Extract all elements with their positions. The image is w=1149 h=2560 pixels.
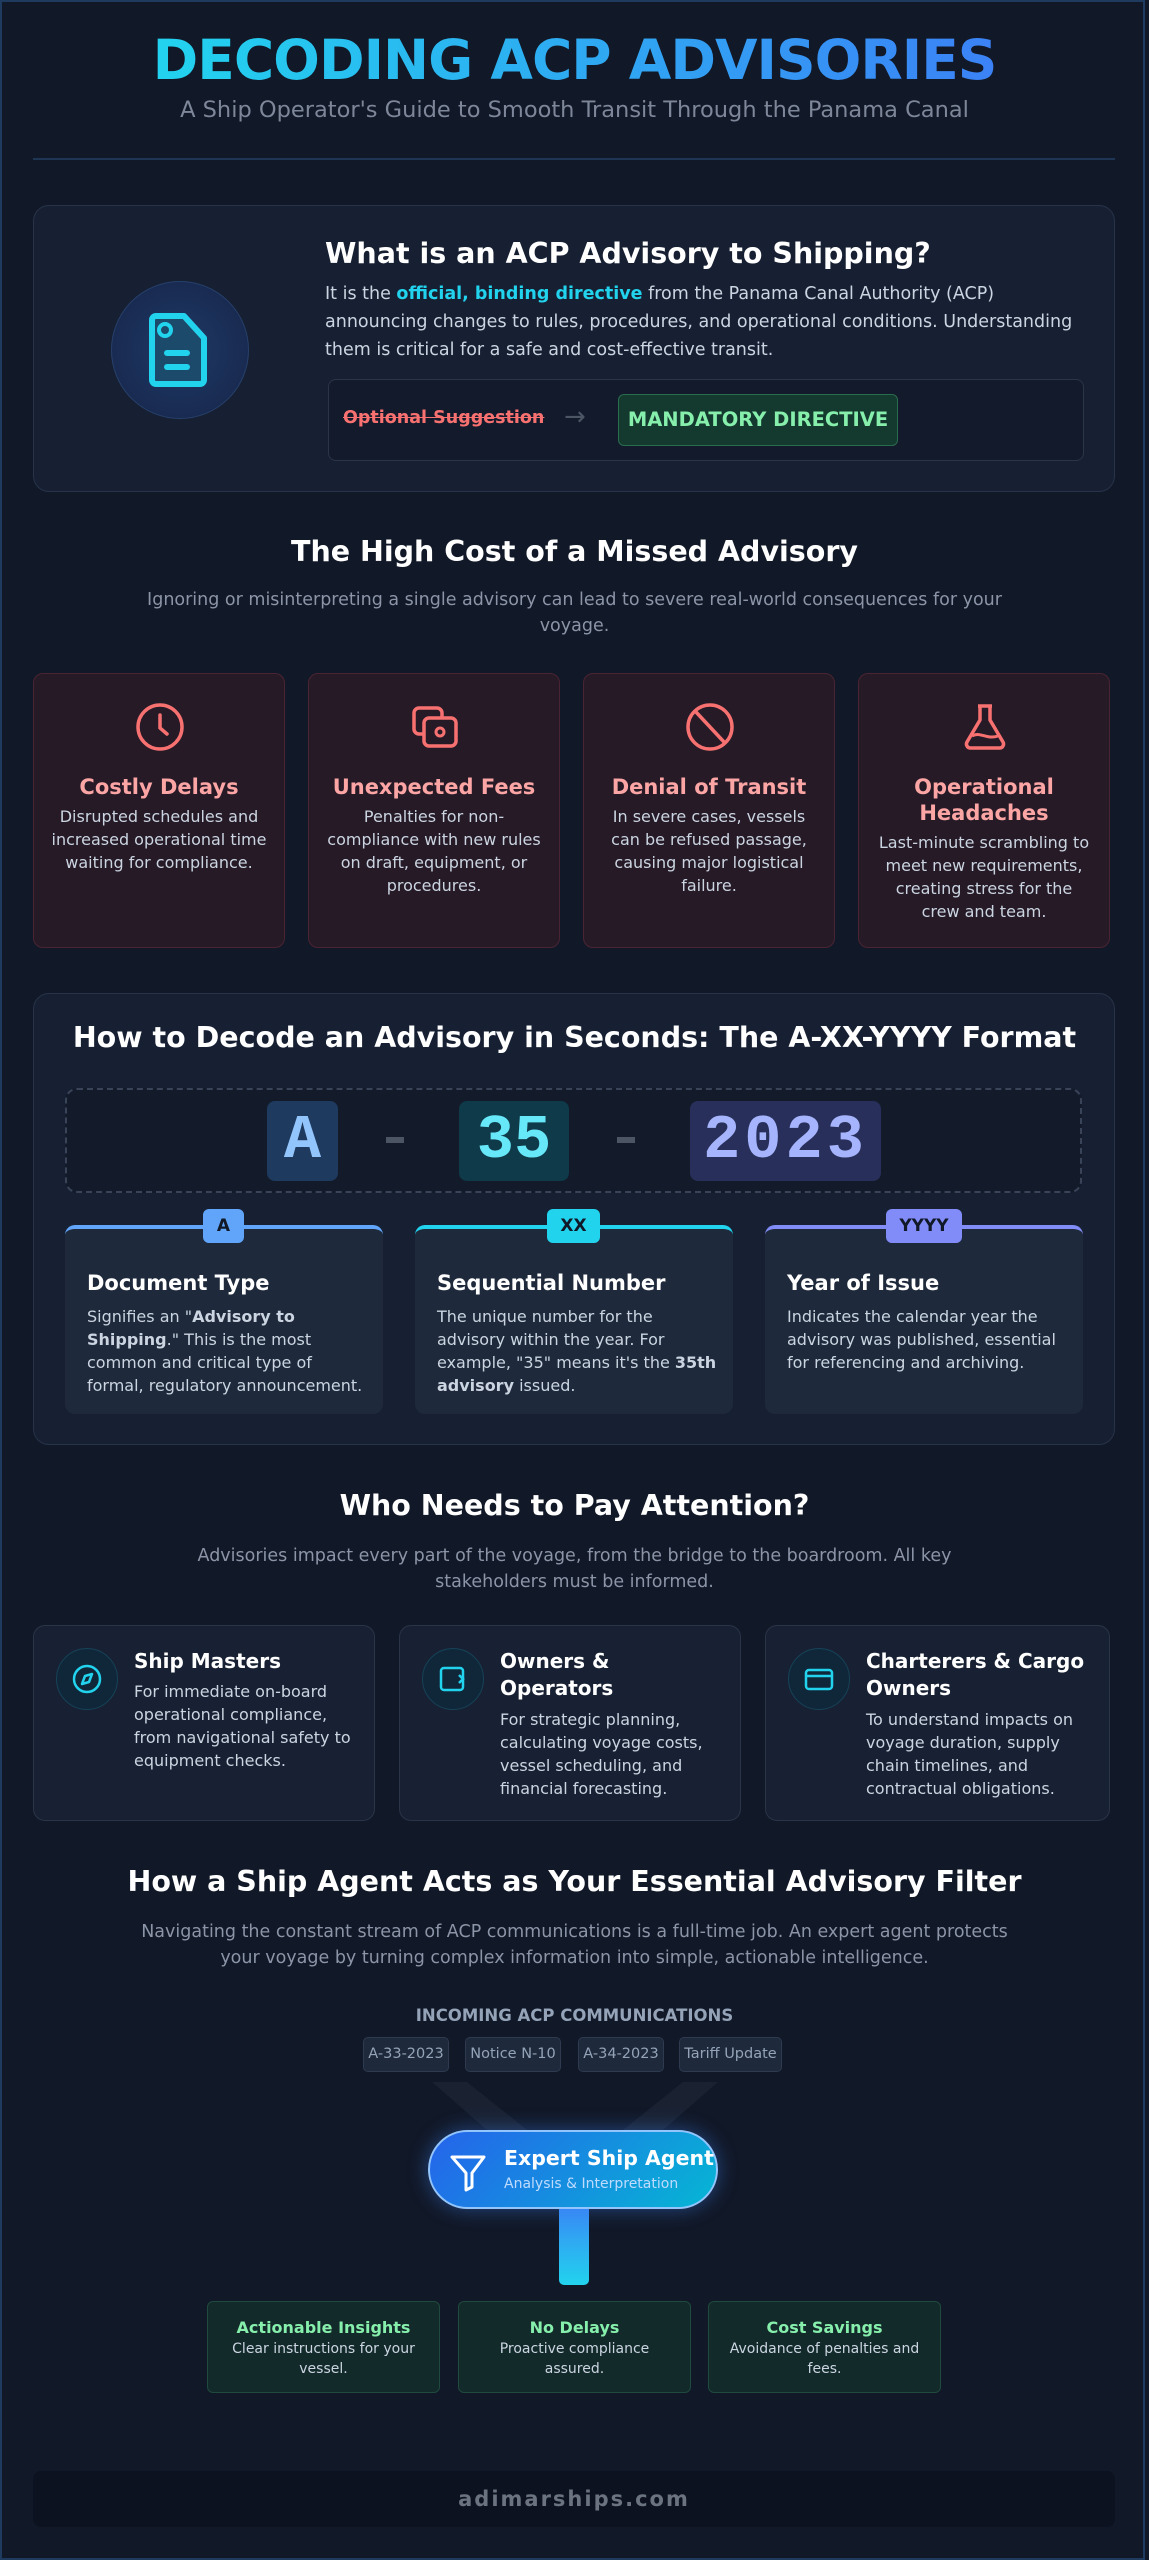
icon: card [788,1648,850,1710]
result: no delays: assured. [545,2361,604,2377]
panel: decode format [33,993,1115,1445]
icon: clock [136,703,184,751]
card: ship masters: For immediate on-board operational compliance, from navigational safety to equipment checks. [134,1682,351,1770]
result: no delays: No Delays [530,2318,619,2337]
stem [559,2200,589,2285]
subtitle: ship agent: Navigating the constant stream of ACP communications is a full-time job. An expert agent protects your voyage by turning complex information into simple, actionable intelligence. [141,1922,1008,1968]
panel: operational headaches: Operational [914,775,1054,799]
result: actionable insights: Actionable Insights [237,2318,410,2337]
comparison box: Optional Suggestion [343,408,544,428]
panel: costly delays: Disrupted schedules and increased operational time waiting for compliance. [52,807,266,872]
card: charterers: Owners [866,1676,951,1700]
result: cost savings: fees. [808,2361,841,2377]
card: document type [65,1225,383,1414]
tile: A: A [284,1105,321,1176]
result: no delays [458,2301,691,2393]
card: owners & operators [399,1625,741,1821]
badge: YYYY [886,1209,962,1243]
panel: denial of transit [583,673,835,948]
icon: ban [686,703,734,751]
result: cost savings [708,2301,941,2393]
expert ship agent pill [428,2130,718,2209]
result: actionable insights: vessel. [299,2361,348,2377]
mandatory badge: MANDATORY DIRECTIVE [628,408,888,431]
card: charterers [765,1625,1110,1821]
card: owners & operators: Operators [500,1676,613,1700]
result: actionable insights: Clear instructions for your [232,2341,415,2357]
format display [65,1088,1082,1193]
result: actionable insights [207,2301,440,2393]
card: year of issue [765,1225,1083,1414]
panel: unexpected fees: Unexpected Fees [333,775,535,799]
heading: who: Who Needs to Pay Attention? [340,1489,809,1522]
panel: what is an advisory [33,205,1115,492]
footer: adimarships.com [458,2487,690,2511]
badge: XX [547,1209,600,1243]
card: owners & operators: For strategic planning, calculating voyage costs, vessel scheduling, and financial forecasting. [500,1710,703,1798]
result: no delays: Proactive compliance [500,2341,649,2357]
badge: A [203,1209,244,1243]
tile: A [267,1101,338,1181]
panel: unexpected fees [308,673,560,948]
mandatory badge [618,394,898,446]
title: DECODING ACP ADVISORIES [153,28,996,92]
icon: filter [450,2156,486,2192]
chips: A-34-2023 [583,2046,659,2062]
card: year of issue: Indicates the calendar year the advisory was published, essential for referencing and archiving. [787,1307,1056,1372]
panel: costly delays [33,673,285,948]
card: sequential number [415,1225,733,1414]
result: cost savings: Cost Savings [766,2318,883,2337]
icon: document [111,281,249,419]
card: charterers: To understand impacts on voyage duration, supply chain timelines, and contractual obligations. [866,1710,1073,1798]
result: cost savings: Avoidance of penalties and [730,2341,919,2357]
heading: ship agent: How a Ship Agent Acts as Your Essential Advisory Filter [127,1865,1022,1898]
card: document type: Document Type [87,1271,269,1295]
card: ship masters: Ship Masters [134,1649,281,1673]
comparison box: → [564,402,586,432]
icon: wallet [422,1648,484,1710]
tile: 35 [459,1101,569,1181]
body text: It is the official, binding directive from the Panama Canal Authority (ACP) announcing changes to rules, procedures, and operational conditions. Understanding them is critical for a safe and cost-effective transit. [325,284,1072,360]
tile: 2023: 2023 [703,1105,868,1176]
badge: A: A [217,1216,230,1236]
card: ship masters [33,1625,375,1821]
card: year of issue: Year of Issue [787,1271,939,1295]
subtitle: who: Advisories impact every part of the voyage, from the bridge to the boardroom. All key stakeholders must be informed. [198,1546,951,1592]
card: document type: Signifies an "Advisory to Shipping." This is the most common and critical type of formal, regulatory announcement. [87,1307,362,1395]
card: sequential number: Sequential Number [437,1271,666,1295]
label: incoming: INCOMING ACP COMMUNICATIONS [416,2006,733,2025]
badge: XX: XX [560,1216,587,1236]
tile: 35: 35 [477,1105,551,1176]
heading: What is an ACP Advisory to Shipping? [325,237,931,270]
chips [363,2037,782,2072]
panel: operational headaches: Headaches [919,801,1049,825]
panel: costly delays: Costly Delays [79,775,239,799]
footer [33,2471,1115,2527]
subtitle: high cost: Ignoring or misinterpreting a single advisory can lead to severe real-world consequences for your voyage. [147,590,1002,636]
heading: high cost: The High Cost of a Missed Advisory [291,535,858,568]
panel: unexpected fees: Penalties for non-compliance with new rules on draft, equipment, or procedures. [327,807,541,895]
chips: A-33-2023 [368,2046,444,2062]
icon: compass [56,1648,118,1710]
panel: denial of transit: In severe cases, vessels can be refused passage, causing major logistical failure. [611,807,807,895]
subtitle: A Ship Operator's Guide to Smooth Transit Through the Panama Canal [180,97,969,123]
badge: YYYY: YYYY [899,1216,949,1236]
panel: operational headaches [858,673,1110,948]
card: sequential number: The unique number for the advisory within the year. For example, "35" means it's the 35th advisory issued. [437,1307,716,1395]
chips: Notice N-10 [470,2046,556,2062]
card: charterers: Charterers & Cargo [866,1649,1084,1673]
icon: flask [964,704,1006,750]
expert ship agent pill: Expert Ship Agent [504,2146,714,2170]
card: owners & operators: Owners & [500,1649,609,1673]
chips: Tariff Update [684,2046,777,2062]
comparison box [328,379,1084,461]
funnel [432,2082,718,2130]
panel: denial of transit: Denial of Transit [612,775,806,799]
icon: money [412,706,458,748]
expert ship agent pill: Analysis & Interpretation [504,2176,678,2192]
heading: decode: How to Decode an Advisory in Seconds: The A-XX-YYYY Format [73,1021,1076,1054]
panel: operational headaches: Last-minute scrambling to meet new requirements, creating stress for the crew and team. [879,833,1089,921]
